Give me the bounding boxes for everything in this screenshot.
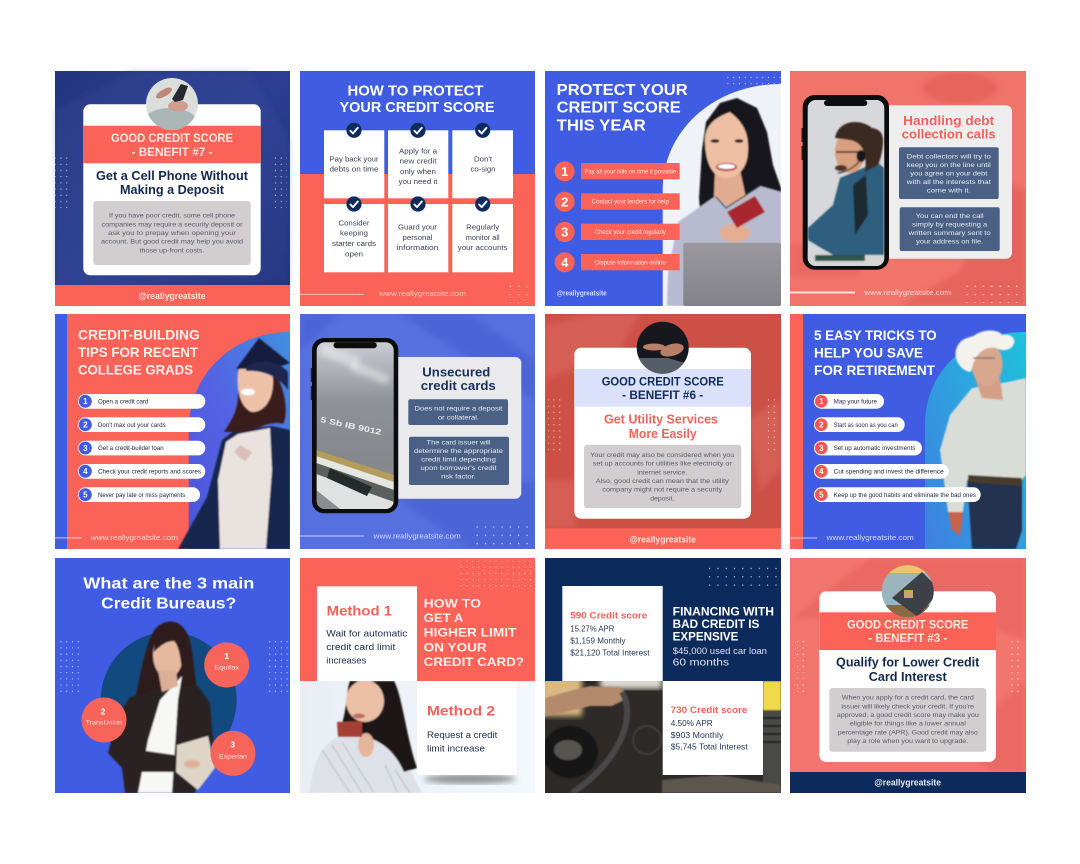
panel: protect your credit score this year: THIS YEAR [557,118,646,135]
benefit card: GOOD CREDIT SCORE [602,376,724,388]
benefit card: those up-front costs. [140,247,205,254]
numbered steps [555,161,680,272]
info card: The card issuer will [426,440,491,447]
numbered steps: 1 [561,164,568,179]
photo: graduate in cap and gown [178,338,290,549]
panel: financing with bad credit is expensive [540,558,781,793]
checklist pills: 2 [83,421,88,430]
info card: You can end the call [916,213,984,220]
score card 730: 4.50% APR [671,718,713,728]
score card 590: 15.27% APR [570,624,614,634]
benefit card: issuer will likely check your credit. If you're [841,703,974,710]
checklist pills: 5 [819,491,824,500]
checklist pills: 3 [83,444,88,453]
checklist pills: Keep up the good habits and eliminate the bad ones [834,493,976,499]
panel: protect your credit score this year: @reallygreatsite [557,291,607,298]
score card 730: $5,745 Total Interest [671,742,748,752]
panel: unsecured credit cards [300,314,535,549]
score card 590: $21,120 Total Interest [570,647,650,657]
bureau circles: 1 [224,651,229,661]
method 1 card: credit card limit [326,642,396,652]
panel: how to protect your credit score: YOUR CREDIT SCORE [340,99,494,116]
panel: good credit benefit 6: @reallygreatsite [629,534,696,544]
benefit card: Making a Deposit [120,182,225,197]
numbered steps: Check your credit regularly [595,230,666,236]
panel: how to protect your credit score: Apply for a [399,146,438,155]
panel: credit-building tips for recent college grads: COLLEGE GRADS [78,362,193,377]
photo: older man in white hat [940,330,1026,549]
panel: good credit benefit 3: @reallygreatsite [874,778,941,788]
checklist pills: Start as soon as you can [834,423,898,429]
numbered steps: Dispute information online [595,260,666,266]
panel: how to protect your credit score: information [396,243,438,252]
photo: stack of credit cards: 5 Sb IB 9012 [320,415,383,437]
panel: what are the 3 main credit bureaus: Credit Bureaus? [101,595,236,612]
checklist pills: 1 [83,397,88,406]
panel: credit-building tips for recent college grads: TIPS FOR RECENT [78,345,199,360]
info card: credit cards [421,379,496,393]
bureau circles: 2 [101,706,106,716]
info card: you agree on your debt [910,171,987,178]
panel: how to protect your credit score: only when [400,167,436,176]
heading: HOW TO [424,596,481,610]
panel: how to protect your credit score: your accounts [458,243,508,252]
numbered steps: Pay all your bills on time if possible [584,169,677,175]
benefit card: internet service. [637,469,687,476]
panel: credit-building tips for recent college grads: CREDIT-BUILDING [78,327,200,342]
benefit card [83,78,261,275]
heading: $45,000 used car loan [673,646,767,657]
benefit card: When you apply for a credit card, the card [842,695,974,702]
panel: how to protect your credit score: Regularly [466,223,499,232]
panel: protect your credit score this year: PROTECT YOUR [557,82,688,99]
method 1 card: Wait for automatic [326,629,408,639]
info card: with all the interests that [906,179,991,186]
numbered steps: 4 [561,255,569,270]
heading [673,606,774,669]
info card: keep you on the line until [907,162,991,169]
bureau circles: Equifax [214,664,240,671]
panel: how to protect your credit score: debts on time [330,164,378,174]
bureau circles: TransUnion [86,719,122,726]
benefit card: - BENEFIT #6 - [622,390,703,402]
info card: simply by requesting a [912,222,988,229]
panel: 5 easy tricks to help you save for retirement [790,314,1026,549]
benefit card: Your credit may also be considered when you [590,452,735,459]
checklist pills: 4 [83,467,88,476]
benefit card: Get Utility Services [604,412,718,426]
panel: how to protect your credit score: Don't [474,154,493,163]
panel: how to get a higher limit [300,558,535,793]
panel: how to protect your credit score: starter cards [332,239,376,248]
panel: how to protect your credit score: HOW TO PROTECT [348,83,484,100]
photo: car interior with steering wheel [540,676,781,793]
info card: Handling debt [903,114,995,128]
score card 730: 730 Credit score [671,705,747,716]
score card 730 [663,681,763,775]
panel: what are the 3 main credit bureaus [55,558,290,793]
checklist pills: Check your credit reports and scores [98,469,201,475]
method 2 card: Method 2 [427,703,495,719]
score card 590: $1,159 Monthly [570,636,626,646]
benefit card: play a role when you want to upgrade. [847,738,968,745]
bureau circles: 3 [230,740,235,750]
info card: written summary sent to [908,230,991,237]
method 2 card: limit increase [427,743,485,753]
heading: BAD CREDIT IS [673,619,760,631]
info card: come with it. [927,188,971,195]
info card [889,105,1012,259]
score card 590: 590 Credit score [570,611,647,622]
heading: 60 months [673,657,729,669]
phone mockup [311,338,398,513]
benefit card: Also, good credit can mean that the utility [596,478,730,485]
panel: credit-building tips for recent college grads: www.reallygreatsite.com [90,533,178,542]
benefit card: - BENEFIT #3 - [868,633,947,645]
icon: hands on laptop photo circle [636,321,690,375]
panel: how to protect your credit score: Pay back your [330,154,379,163]
score card 730: $903 Monthly [671,730,724,740]
panel: how to protect your credit score: monitor all [466,233,500,242]
panel: good credit benefit 3 [790,558,1026,793]
panel: how to protect your credit score: www.reallygreatsite.com [378,289,466,298]
numbered steps: 3 [561,225,568,240]
benefit card [819,565,996,762]
info card: Does not require a deposit [415,406,503,413]
checklist pills: Never pay late or miss payments [98,493,185,499]
info card: collection calls [902,127,996,141]
checklist pills: 1 [819,397,824,406]
panel: handling debt collection calls [790,71,1026,306]
panel: good credit benefit 7: @reallygreatsite [138,291,206,301]
panel: how to protect your credit score: co-sign [470,164,496,174]
panel: 5 easy tricks to help you save for retirement: HELP YOU SAVE [814,346,923,361]
panel: unsecured credit cards: www.reallygreatsite.com [373,531,461,540]
panel: good credit benefit 6 [545,314,781,549]
checklist pills: Don't max out your cards [98,423,166,429]
benefit card: Card Interest [869,669,947,684]
checklist pills: Map your future [834,399,878,405]
benefit card: - BENEFIT #7 - [132,147,213,159]
panel: protect your credit score this year [545,71,781,306]
heading [424,596,524,669]
info card: upon borrower's credit [420,465,497,472]
panel: how to protect your credit score: personal [402,233,433,242]
panel: how to protect your credit score: open [345,249,363,258]
info card: Debt collectors will try to [907,154,991,161]
photo: stack of credit cards [316,343,394,509]
panel: how to protect your credit score: keeping [340,229,368,238]
heading: FINANCING WITH [673,606,774,618]
panel: 5 easy tricks to help you save for retirement: www.reallygreatsite.com [826,533,914,542]
method 2 card [417,681,517,775]
info card: Unsecured [422,366,490,380]
shadow [424,774,516,784]
panel: 5 easy tricks to help you save for retirement: 5 EASY TRICKS TO [814,328,937,343]
panel: how to protect your credit score: new credit [400,157,437,166]
benefit card: Qualify for Lower Credit [836,654,980,669]
info card [398,357,521,499]
panel: credit-building tips for recent college grads [55,314,290,549]
benefit card: company might not require a security [602,487,723,494]
checklist pills [814,394,981,502]
benefit card: deposit. [650,495,674,502]
method 1 card: Method 1 [327,602,392,618]
method 2 card: Request a credit [427,730,498,740]
photo: woman holding credit card [310,680,422,793]
info card: risk factor. [441,474,476,481]
checklist pills: 2 [819,421,824,430]
panel: handling debt collection calls: www.reallygreatsite.com [863,288,951,297]
benefit card: Get a Cell Phone Without [96,168,249,183]
benefit card: eligible for things like a lower annual [850,721,966,728]
numbered steps: 2 [561,194,568,209]
bureau circles: Experian [219,754,247,761]
photo: smiling woman with credit card [667,98,781,306]
panel: how to protect your credit score: Guard your [398,223,437,232]
score card 590 [562,586,663,681]
heading: CREDIT CARD? [424,655,524,669]
checklist pills: 4 [819,467,824,476]
benefit card: ask you to prepay when opening your [108,230,237,237]
benefit card: GOOD CREDIT SCORE [111,133,233,145]
benefit card: More Easily [629,427,697,441]
benefit card: set up accounts for utilities like electricity or [593,461,733,468]
photo: laptop [683,243,781,306]
checklist pills: Cut spending and invest the difference [834,469,944,475]
benefit card: companies may require a security deposit or [102,221,243,228]
checklist pills: Set up automatic investments [834,446,915,452]
benefit card: percentage rate (APR). Good credit may also [838,729,978,736]
heading: HIGHER LIMIT [424,626,517,640]
method 1 card: increases [326,655,367,665]
numbered steps: Contact your lenders for help [592,200,669,206]
panel: 5 easy tricks to help you save for retirement: FOR RETIREMENT [814,363,936,378]
checklist pills [78,394,205,502]
panel: how to protect your credit score: you need it [398,177,438,186]
photo: call-center agent [808,122,884,266]
photo: businesswoman with crossed arms [108,621,215,793]
info card: or collateral. [438,414,479,421]
icon: phone photo circle [146,78,198,130]
icon: credit card photo circle [882,565,934,618]
benefit card: GOOD CREDIT SCORE [847,619,969,631]
checklist pills: Open a credit card [98,399,148,405]
panel: what are the 3 main credit bureaus: What are the 3 main [83,575,254,592]
info card: credit limit depending [421,457,496,464]
checklist pills: Get a credit-builder loan [98,446,164,452]
info card: determine the appropriate [414,448,503,455]
benefit card: account. But good credit may help you avoid [101,239,243,246]
benefit card: approved, a good credit score may make you [837,712,979,719]
heading: EXPENSIVE [673,632,739,644]
method 1 card [317,586,417,681]
heading: GET A [424,611,464,625]
panel: how to protect your credit score [300,71,535,306]
panel: how to protect your credit score: Consider [338,218,370,227]
phone mockup [802,95,889,270]
checklist pills: 5 [83,491,88,500]
panel: good credit benefit 7 [55,71,290,306]
bureau circles [82,642,256,776]
heading: ON YOUR [424,640,487,654]
checklist pills: 3 [819,444,824,453]
info card: your address on file. [916,239,983,246]
benefit card [574,321,751,519]
panel: protect your credit score this year: CREDIT SCORE [557,100,681,117]
benefit card: If you have poor credit, some cell phone [109,213,235,220]
